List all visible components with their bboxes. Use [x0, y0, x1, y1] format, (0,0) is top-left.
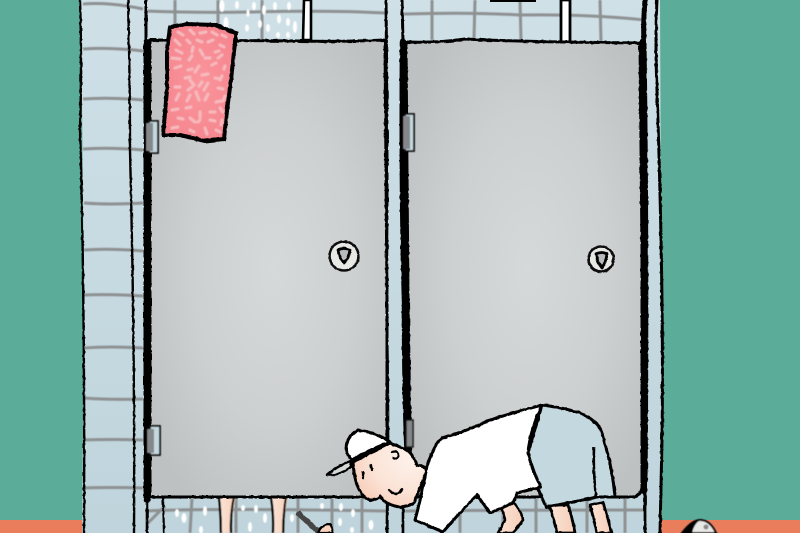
face details: [363, 452, 402, 494]
shorts: [528, 405, 615, 507]
cap: [346, 430, 390, 460]
hinge: right door bottom: [406, 420, 413, 447]
cap brim: [327, 461, 352, 475]
door: right stall: [406, 39, 642, 497]
vertical frame lines: [80, 0, 662, 533]
white shirt: [415, 405, 542, 532]
far arm: [498, 502, 523, 533]
white pipe: [303, 0, 311, 40]
leg left: [549, 505, 575, 533]
fixture at top: [490, 0, 536, 2]
door: left stall: [150, 40, 387, 497]
leg right: [590, 502, 612, 533]
towel flecks: [172, 30, 226, 134]
white pipe right: [561, 0, 570, 42]
legs behind left door: [219, 497, 288, 533]
tile grid lines: [83, 0, 645, 533]
tiled wall: [81, 0, 662, 533]
near hand and phone: [299, 514, 333, 533]
door knob: right: [588, 246, 614, 272]
hinge: right door top: [403, 114, 414, 151]
hinge: left door bottom: [147, 426, 160, 455]
hinge: left door top: [146, 121, 158, 153]
shorts crease: [594, 447, 596, 497]
man crouching and peeking under doors: [299, 405, 615, 533]
shower stall structure: [80, 0, 662, 533]
background: orange floor: [0, 520, 800, 533]
door knob: left: [330, 242, 358, 270]
pink towel: [163, 24, 236, 141]
shower water drops top: [220, 0, 297, 38]
head: [353, 443, 428, 507]
object on floor at right: [682, 520, 716, 533]
shower water drops bottom: [175, 503, 374, 533]
